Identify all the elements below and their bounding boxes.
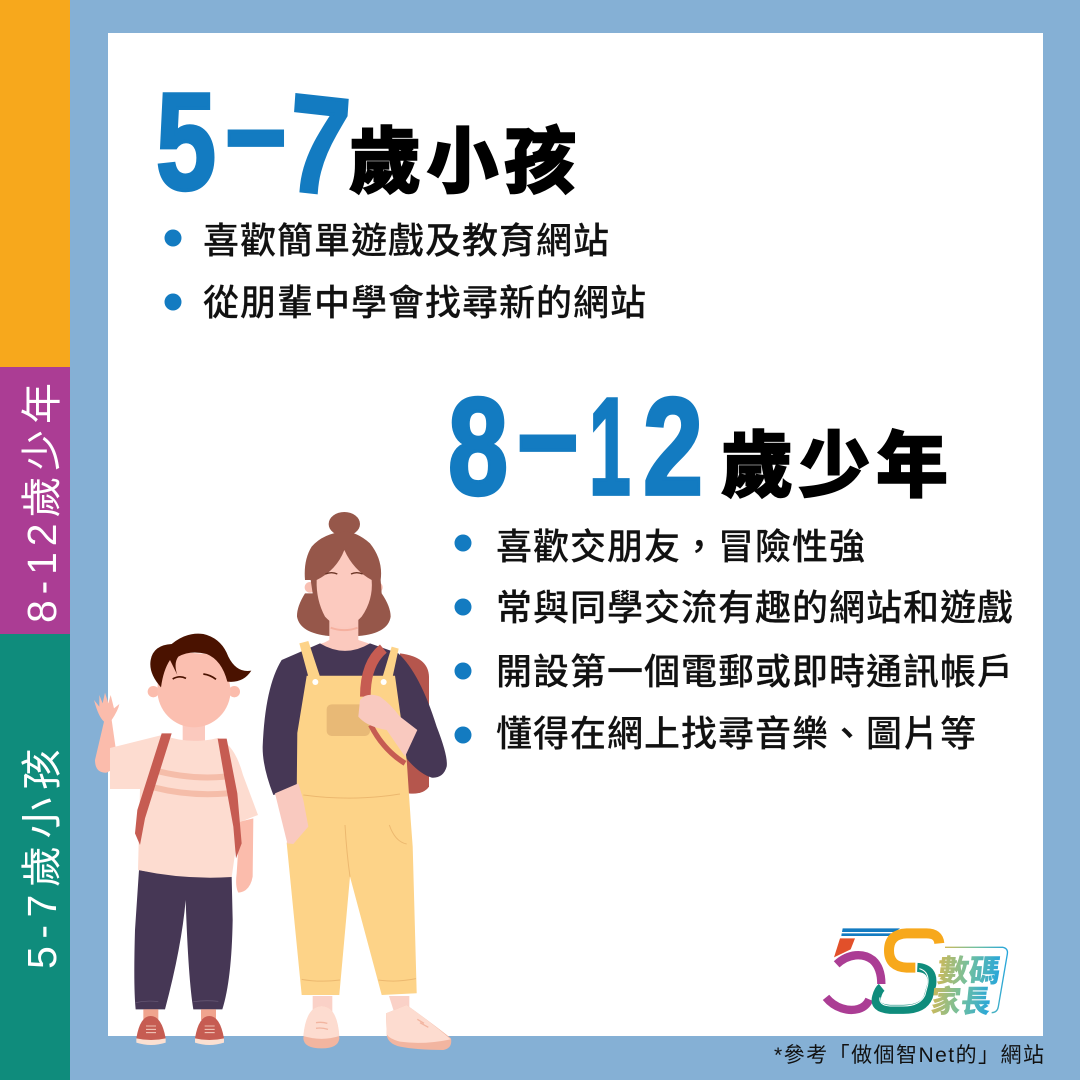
logo: 55 digital parents <box>826 928 1007 1019</box>
logo track line <box>880 969 928 1006</box>
logo frame <box>945 947 1007 1013</box>
illustration: girl with overalls <box>263 512 451 1050</box>
bullet 3: 開設第一個電郵或即時通訊帳戶 <box>496 651 1014 692</box>
logo stripes <box>841 928 900 936</box>
bullet 2: 從朋輩中學會找尋新的網站 <box>203 282 647 323</box>
logo orange S <box>889 933 939 968</box>
tab: 5-7 <box>0 634 70 1080</box>
heading: 8-12 years: 8– <box>448 357 578 524</box>
sidebar tabs <box>0 0 70 1080</box>
heading: 5-7 years: 歲小孩 <box>349 123 576 203</box>
bullet list: 8-12 years <box>454 526 1014 754</box>
bullet 1: 喜歡簡單遊戲及教育網站 <box>203 220 610 261</box>
logo flag <box>834 938 855 957</box>
heading: 5-7 years: 5–7 <box>156 52 354 226</box>
tab: orange <box>0 0 70 367</box>
logo text: 數碼 <box>936 953 1002 988</box>
illustration: boy waving <box>94 634 258 1045</box>
logo green S <box>876 967 932 1009</box>
heading: 8-12 years: 2 <box>643 370 703 524</box>
bullet 1: 喜歡交朋友，冒險性強 <box>496 526 866 567</box>
source note: *參考「做個智Net的」網站 <box>774 1044 1044 1067</box>
heading: 8-12 years: 1 <box>589 369 631 524</box>
heading: 5-7 years <box>156 52 576 226</box>
logo purple five <box>826 955 881 1010</box>
heading: 8-12 years: 歲少年 <box>721 427 948 507</box>
bullet 2: 常與同學交流有趣的網站和遊戲 <box>496 587 1014 628</box>
bullet list: 5-7 years <box>164 220 647 323</box>
logo text <box>929 953 1002 1019</box>
logo text: 家長 <box>929 984 993 1019</box>
tab: 8-12: 8-12歲少年 <box>19 383 65 623</box>
heading: 8-12 years <box>448 357 948 524</box>
tab: 8-12 <box>0 367 70 634</box>
bullet 4: 懂得在網上找尋音樂、圖片等 <box>496 713 977 754</box>
tab: 5-7: 5-7歲小孩 <box>19 749 65 969</box>
